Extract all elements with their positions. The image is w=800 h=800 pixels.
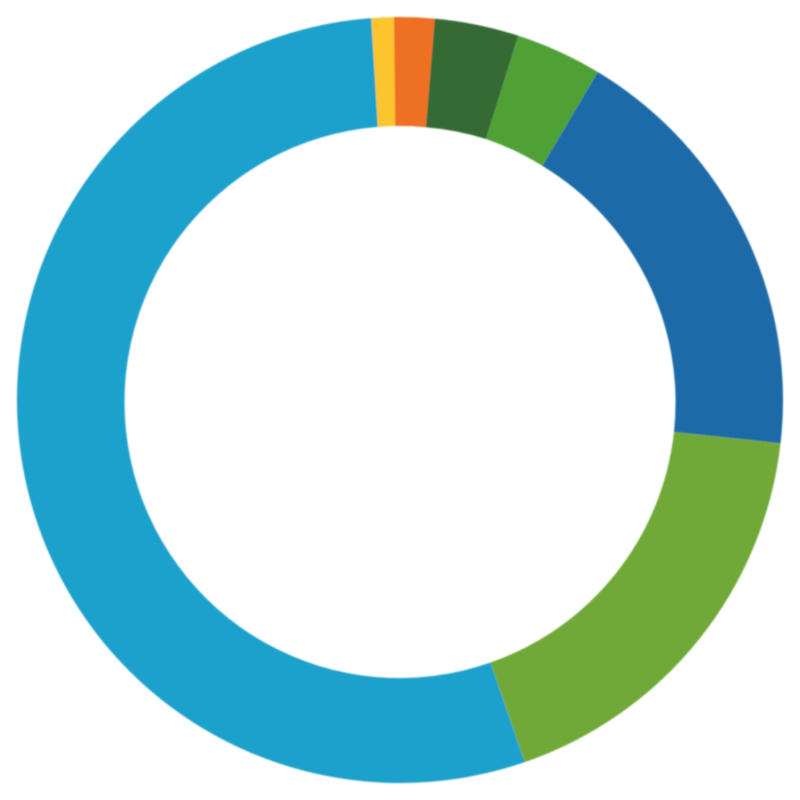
segment: dark blue [542, 72, 783, 443]
segment: yellow [371, 17, 395, 127]
segment: orange [394, 17, 435, 127]
segment: light blue [17, 18, 525, 783]
segment: green [486, 36, 598, 166]
segment: olive green [490, 432, 781, 762]
segment: dark green [426, 19, 518, 139]
